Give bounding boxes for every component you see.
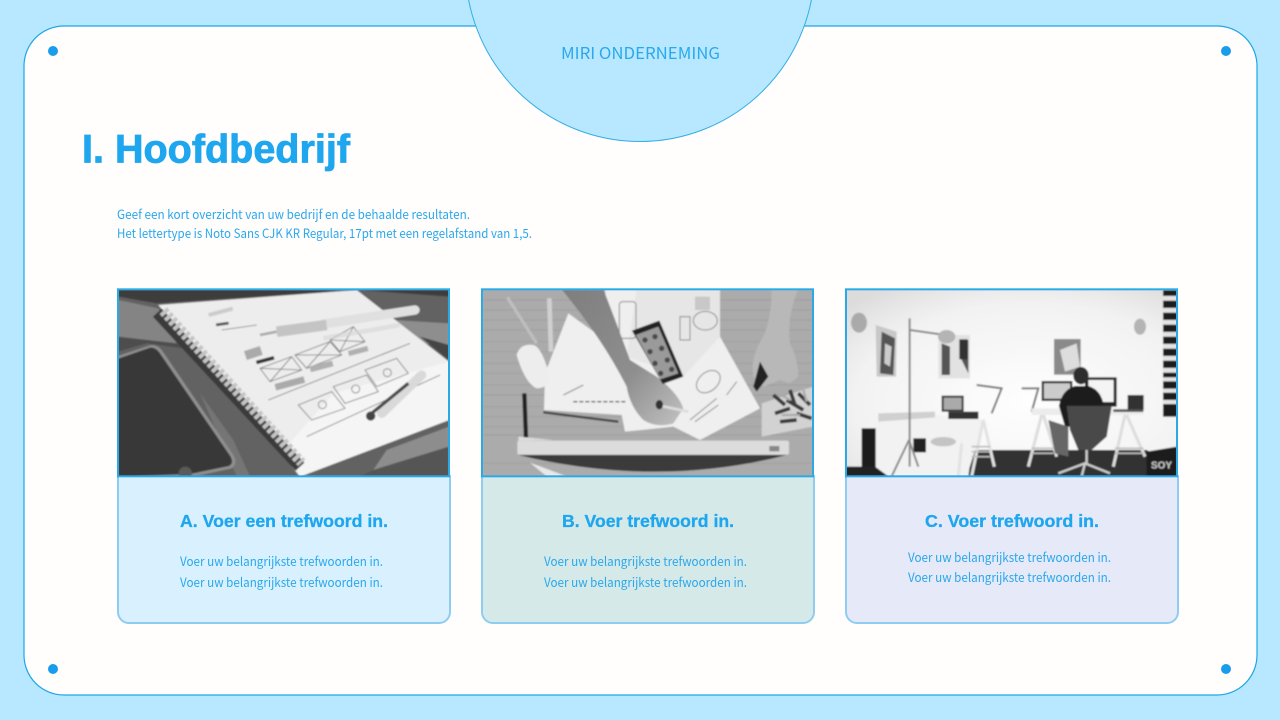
window blind [1163, 290, 1177, 417]
mouse [517, 345, 550, 388]
card B body text: Voer uw belangrijkste trefwoorden in. [544, 551, 747, 570]
phone [118, 345, 235, 477]
wireframes [222, 325, 440, 437]
card A heading: A. Voer een trefwoord in. [180, 511, 388, 531]
card C [846, 289, 1178, 623]
card A text panel [118, 476, 450, 623]
floor box [1147, 447, 1177, 476]
card C body text: Voer uw belangrijkste trefwoorden in. [908, 547, 1111, 566]
card A body text: Voer uw belangrijkste trefwoorden in. [180, 551, 383, 570]
card A [118, 289, 450, 623]
card B body text: Voer uw belangrijkste trefwoorden in. [544, 572, 747, 591]
card B text panel [482, 476, 814, 623]
monitors [1042, 381, 1072, 401]
arm and hand [562, 289, 683, 425]
top semicircle badge [466, 0, 814, 142]
photo: notebook with wireframes and phone [118, 289, 449, 480]
floor [968, 448, 1150, 476]
intro text: Geef een kort overzicht van uw bedrijf en de behaalde resultaten. [117, 204, 470, 223]
card C text panel [846, 476, 1178, 623]
desk lamps [977, 385, 1038, 413]
card B body text [544, 551, 747, 591]
title: I. Hoofdbedrijf [82, 128, 351, 172]
posters [876, 325, 897, 377]
photo: studio office with person at desk: SOY [1151, 460, 1172, 471]
bowl of clips [762, 387, 813, 437]
spiral binding [157, 313, 300, 467]
trestles left desk [958, 420, 994, 476]
badge label: MIRI ONDERNEMING [561, 40, 720, 64]
card A body text [180, 551, 383, 591]
card A body text: Voer uw belangrijkste trefwoorden in. [180, 572, 383, 591]
person [1073, 367, 1089, 384]
card B [482, 289, 814, 623]
chair [1067, 406, 1112, 450]
card C heading: C. Voer trefwoord in. [925, 511, 1099, 531]
card C body text [908, 547, 1111, 586]
intro text: Het lettertype is Noto Sans CJK KR Regular, 17pt met een regelafstand van 1,5. [117, 223, 532, 242]
right hand [753, 289, 798, 387]
pencils and pen [507, 297, 537, 343]
monitor [518, 455, 787, 472]
photo: desk with hands, phone and sketches [482, 289, 813, 476]
lamp stand [892, 318, 945, 476]
papers [544, 289, 760, 440]
card C body text: Voer uw belangrijkste trefwoorden in. [908, 567, 1111, 586]
smartphone [632, 321, 683, 384]
left desk [969, 422, 980, 468]
pens [323, 310, 415, 324]
intro text [117, 204, 532, 242]
notebook page [158, 290, 449, 477]
photo: studio office with person at desk [846, 289, 1177, 476]
right desk [1032, 408, 1143, 415]
card B heading: B. Voer trefwoord in. [562, 511, 734, 531]
